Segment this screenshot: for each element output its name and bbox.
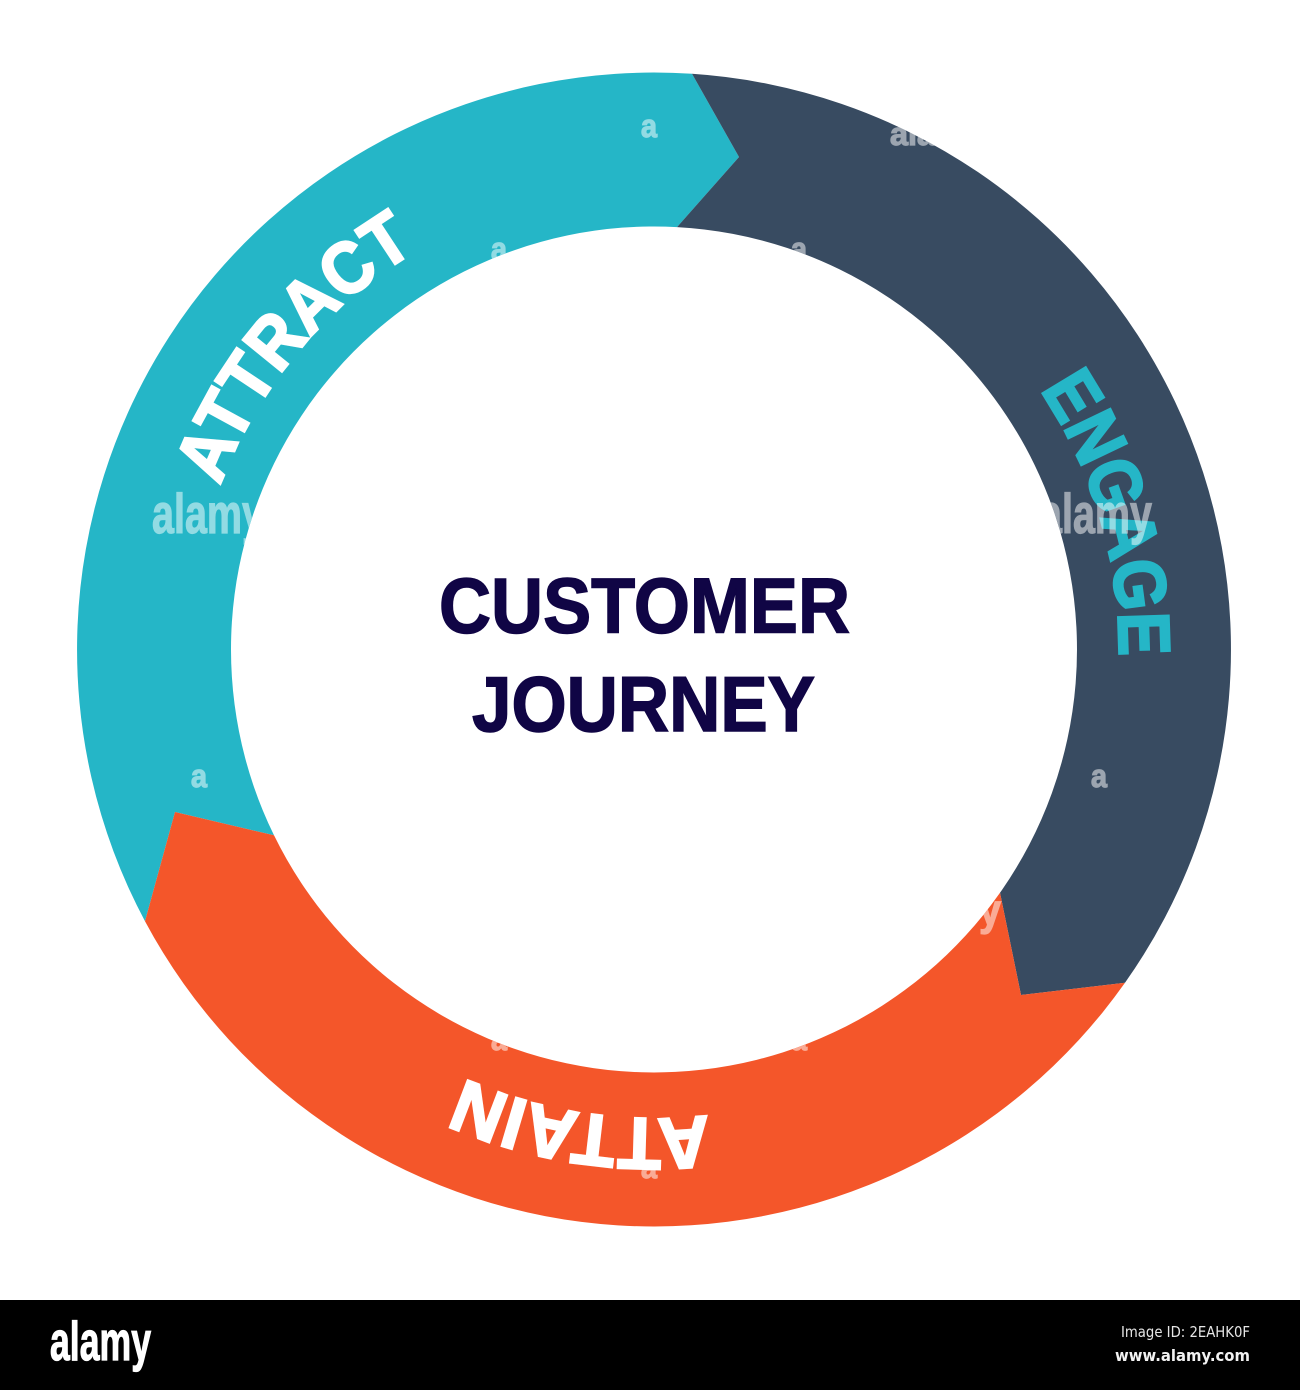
stock watermark on ring: a [491, 1021, 507, 1057]
stock watermark on ring: a [491, 231, 507, 267]
footer website: www.alamy.com [1115, 1346, 1250, 1365]
segment: engage (navy arrow) [677, 74, 1231, 995]
segment: attain (orange arrow) [145, 812, 1125, 1226]
footer logo: alamy: alamy [50, 1310, 151, 1372]
stock watermark on ring: a [791, 231, 807, 267]
footer bar [0, 1300, 1300, 1390]
center title [439, 562, 850, 748]
stock watermark on ring: a [791, 1021, 807, 1057]
stock watermark on ring: alamy [1040, 482, 1152, 545]
stock watermark on ring: alamy [152, 482, 264, 545]
label: attain: ATTAIN [448, 1078, 708, 1170]
stock watermark on ring: a [641, 108, 657, 144]
stock watermark on ring: ala [890, 116, 935, 152]
segment: attract (teal arrow) [77, 73, 739, 921]
label: engage: ENGAGE [1041, 366, 1171, 655]
stock watermark on ring [152, 108, 1152, 1185]
stock watermark on ring: a [191, 758, 207, 794]
footer image id: Image ID: 2EAHK0F [1121, 1323, 1250, 1341]
label: attract: ATTRACT [179, 207, 405, 486]
center title: JOURNEY [472, 660, 815, 748]
stock watermark on ring: y [979, 886, 1001, 935]
center title: CUSTOMER [439, 562, 850, 650]
stock watermark on ring: a [1091, 758, 1107, 794]
stock watermark on ring: a [641, 1149, 657, 1185]
